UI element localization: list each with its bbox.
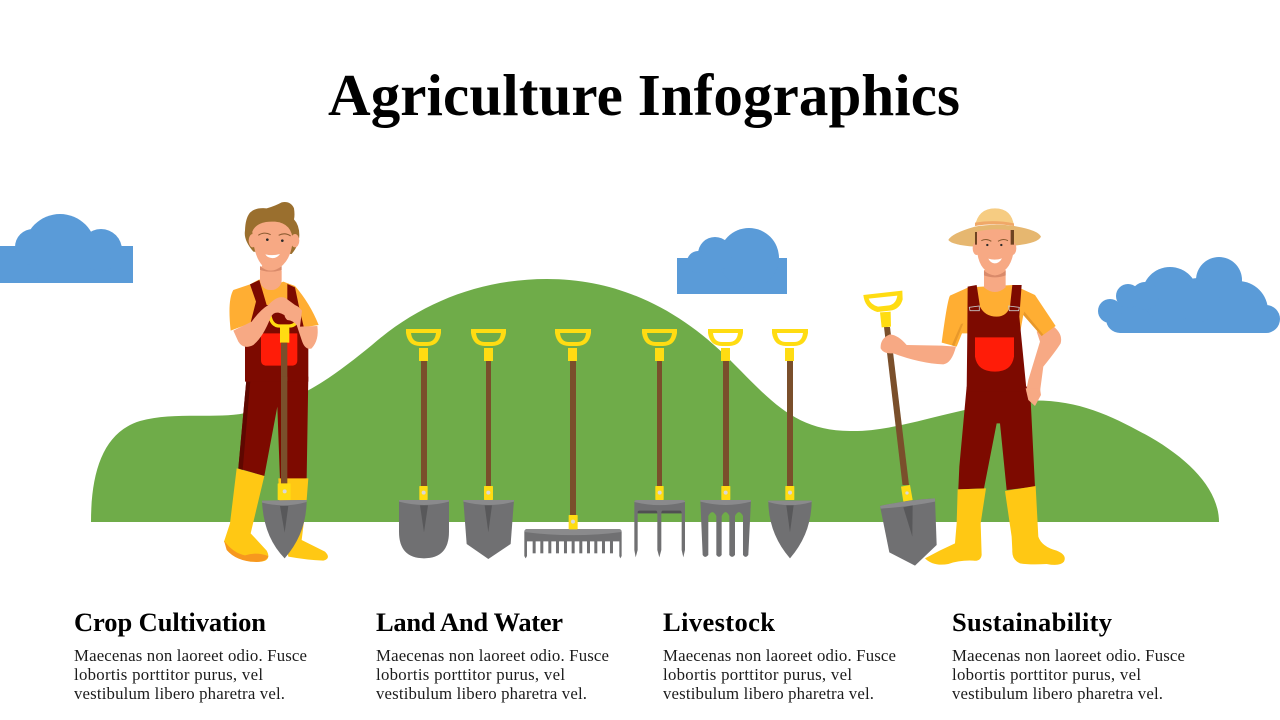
text block: Land And Water: Maecenas non laoreet odio. Fusce (376, 646, 609, 665)
text block: Land And Water: Land And Water (376, 607, 563, 637)
farmer: left, curly hair, leaning on shovel (224, 202, 328, 562)
text block: Sustainability: lobortis porttitor purus, vel (952, 665, 1141, 684)
text block: Livestock (663, 607, 896, 703)
text block: Livestock: Livestock (663, 607, 775, 637)
text block: Land And Water: lobortis porttitor purus, vel (376, 665, 565, 684)
text block: Livestock: vestibulum libero pharetra vel. (663, 684, 874, 703)
tool: round shovel (399, 329, 449, 558)
title: Agriculture Infographics (328, 62, 960, 128)
right farmer shovel blade (880, 388, 1041, 566)
text block: Livestock: Maecenas non laoreet odio. Fusce (663, 646, 896, 665)
tool: digging fork (700, 329, 751, 557)
text block: Sustainability (952, 607, 1185, 703)
text block: Sustainability: vestibulum libero pharetra vel. (952, 684, 1163, 703)
right farmer upper body (863, 208, 1061, 392)
text block: Crop Cultivation (74, 607, 307, 703)
text block: Livestock: lobortis porttitor purus, vel (663, 665, 852, 684)
cloud: left (0, 214, 133, 286)
text block: Crop Cultivation: Maecenas non laoreet odio. Fusce (74, 646, 307, 665)
tool: pointed spade (463, 329, 514, 559)
green hill (91, 279, 1219, 522)
text block: Land And Water (376, 607, 609, 703)
farmer: right, straw hat, holding shovel (863, 208, 1065, 566)
left farmer shovel (262, 377, 307, 558)
text block: Land And Water: vestibulum libero pharetra vel. (376, 684, 587, 703)
text block: Crop Cultivation: vestibulum libero pharetra vel. (74, 684, 285, 703)
cloud: right (1098, 257, 1280, 341)
text block: Sustainability: Maecenas non laoreet odio. Fusce (952, 646, 1185, 665)
right farmer shovel shaft (884, 327, 909, 485)
tool: pointed shovel (768, 329, 812, 558)
right farmer legs and boots (925, 387, 1065, 565)
cloud: middle (677, 228, 787, 294)
left farmer upper body (229, 202, 319, 382)
text block: Crop Cultivation: lobortis porttitor purus, vel (74, 665, 263, 684)
left farmer legs and boots (224, 377, 328, 562)
text block: Crop Cultivation: Crop Cultivation (74, 607, 266, 637)
tool: pitchfork (634, 329, 685, 557)
tool: rake (524, 329, 622, 558)
text block: Sustainability: Sustainability (952, 607, 1112, 637)
